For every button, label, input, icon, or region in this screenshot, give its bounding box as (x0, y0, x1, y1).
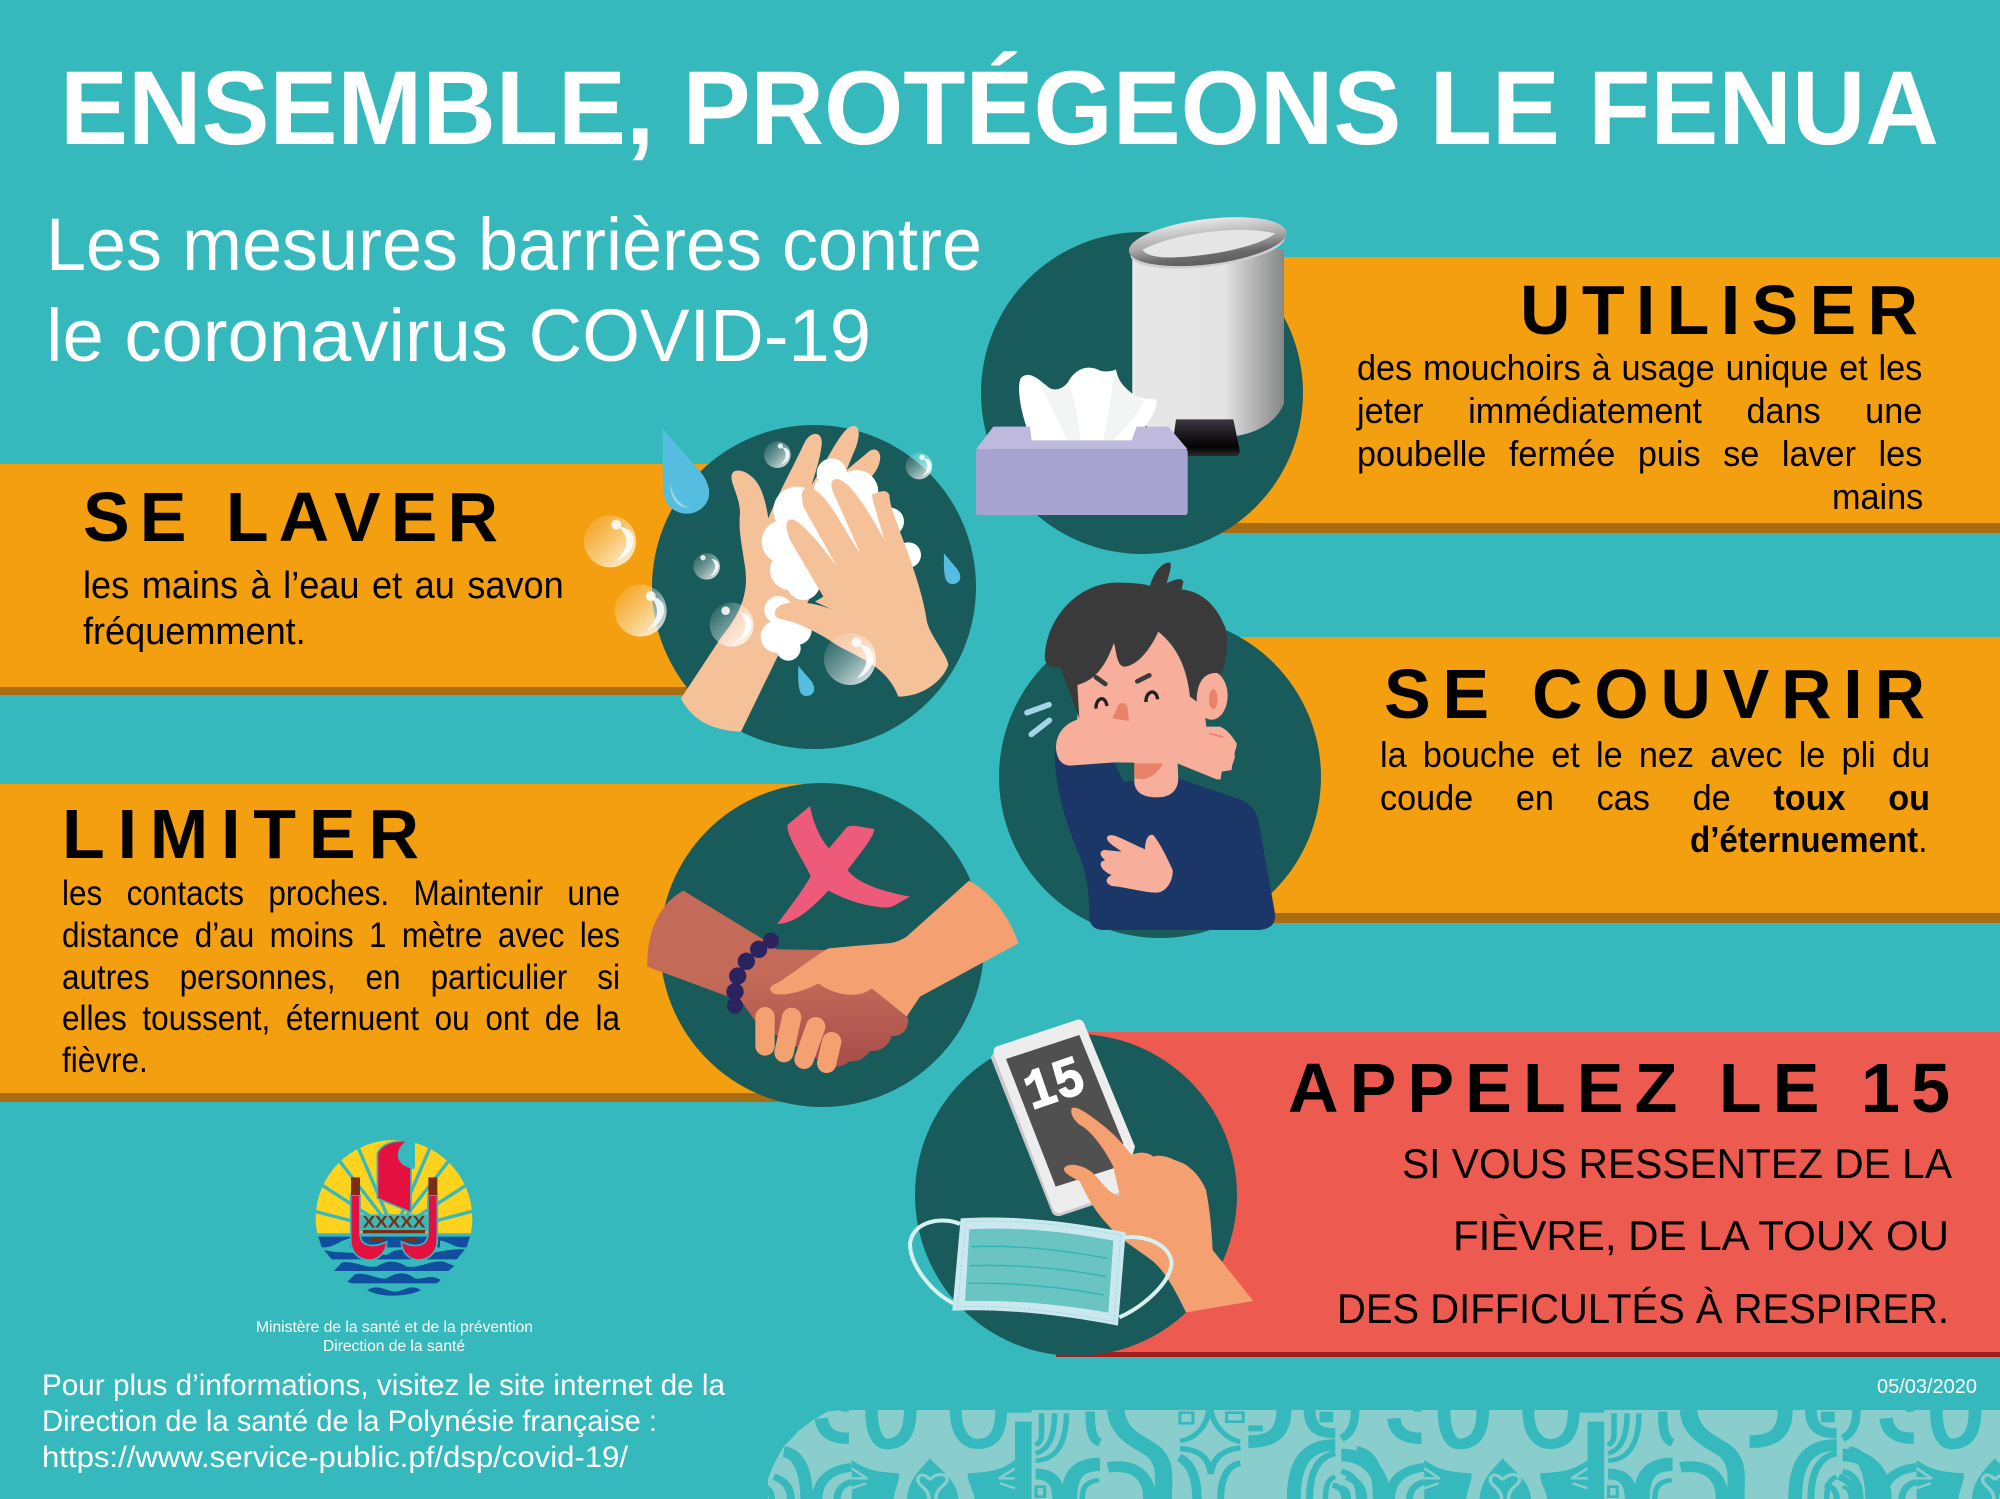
band: utiliser (1142, 257, 2000, 533)
text: se couvrir details: la bouche et le nez avec le pli du (1380, 734, 1930, 775)
logo: pirogue hulls: XXXXX (363, 1212, 425, 1231)
icon: bracelet (726, 933, 779, 1014)
soap foam (761, 458, 921, 661)
text: appelez le 15 details (1337, 1140, 1952, 1332)
text: limiter details: autres personnes, en particulier si (62, 958, 620, 997)
logo: pirogue hulls (351, 1177, 437, 1260)
text: limiter details: les contacts proches. Maintenir une (62, 874, 620, 913)
icon: right hand (775, 479, 948, 697)
text: utiliser details (1356, 347, 1923, 517)
text: utiliser details: jeter immédiatement dans une (1357, 390, 1922, 431)
text: appelez le 15 details: FIÈVRE, DE LA TOUX OU (1453, 1212, 1949, 1259)
figure: raised arm (1056, 718, 1237, 779)
text: utiliser details: des mouchoirs à usage unique et les (1357, 347, 1922, 388)
figure: head (1045, 563, 1228, 763)
band: se laver (0, 464, 740, 695)
logo: waves (318, 1237, 470, 1296)
figure: hand on chest (1101, 835, 1173, 893)
text: ministry name: Ministère de la santé et de la prévention (256, 1319, 533, 1336)
figure: neck (1134, 757, 1178, 797)
illustration: person coughing into elbow (999, 563, 1321, 938)
text: limiter details: elles toussent, éternuent ou ont de la (62, 999, 620, 1038)
illustration: tissue box and bin (976, 210, 1303, 554)
text: se couvrir details: coude en cas de toux ou (1380, 777, 1930, 818)
figure: pointing hand (1064, 1108, 1253, 1312)
illustration: handshake with cross (647, 783, 1018, 1107)
logo: Polynésie française emblem (316, 1140, 472, 1296)
illustration: washing hands (584, 425, 976, 749)
icon: big water drop (662, 428, 709, 514)
figure: brown arm (647, 891, 908, 1067)
icon: phone: 15 (1017, 1047, 1094, 1127)
heading: se laver: SE LAVER (83, 478, 498, 556)
heading: limiter: LIMITER (62, 795, 419, 873)
text: limiter details: distance d’au moins 1 mètre avec les (62, 916, 620, 955)
logo: sun rays (316, 1140, 472, 1234)
figure: shirt (1055, 750, 1275, 930)
text: se couvrir details (1380, 734, 1930, 860)
text: appelez le 15 details: DES DIFFICULTÉS À RESPIRER. (1337, 1285, 1949, 1332)
text: limiter details (62, 874, 620, 1080)
text: se laver details: les mains à l’eau et au savon (83, 565, 564, 607)
footer decorative tifaifai pattern (760, 1410, 2000, 1499)
subtitle: le coronavirus COVID-19 (46, 294, 871, 377)
icon: pedal bin (1126, 210, 1289, 456)
text: utiliser details: mains (1832, 476, 1923, 517)
figure: fingers (765, 1017, 832, 1063)
icon: tissue box (976, 368, 1188, 515)
text: se laver details (83, 565, 564, 653)
text: more information: https://www.service-public.pf/dsp/covid-19/ (42, 1441, 629, 1474)
text: date: 05/03/2020 (1877, 1376, 1977, 1398)
band: se couvrir (1160, 637, 2000, 923)
text: utiliser details: poubelle fermée puis se laver les (1357, 433, 1922, 474)
icon: left hand (681, 426, 880, 732)
text: ministry name: Direction de la santé (323, 1338, 465, 1355)
subtitle: Les mesures barrières contre (46, 203, 982, 286)
subtitle (46, 203, 982, 377)
figure: orange arm (770, 881, 1018, 1017)
text: more information (42, 1369, 725, 1474)
title: ENSEMBLE, PROTÉGEONS LE FENUA (60, 50, 1939, 167)
text: appelez le 15 details: SI VOUS RESSENTEZ DE LA (1402, 1140, 1952, 1187)
icon: cough lines (1027, 705, 1049, 734)
icon: soap bubbles (584, 441, 932, 685)
band: limiter (0, 784, 830, 1102)
heading: utiliser: UTILISER (1520, 271, 1918, 349)
text: se couvrir details: d’éternuement. (1690, 819, 1927, 860)
text: more information: Pour plus d’informations, visitez le site internet de la (42, 1369, 725, 1402)
text: limiter details: fièvre. (62, 1041, 148, 1080)
icon: face mask (910, 1217, 1172, 1326)
text: se laver details: fréquemment. (83, 611, 306, 653)
illustration: phone, hand and mask (910, 1019, 1253, 1356)
icon: small drops (798, 553, 960, 696)
text: ministry name (256, 1319, 533, 1355)
heading: appelez le 15: APPELEZ LE 15 (1288, 1049, 1950, 1127)
icon: phone (991, 1019, 1135, 1216)
icon: pink cross (777, 806, 910, 924)
text: more information: Direction de la santé de la Polynésie française : (42, 1405, 657, 1438)
band: appelez le 15 (1056, 1032, 2000, 1357)
heading: se couvrir: SE COUVRIR (1384, 655, 1925, 733)
logo: sail (375, 1138, 415, 1212)
